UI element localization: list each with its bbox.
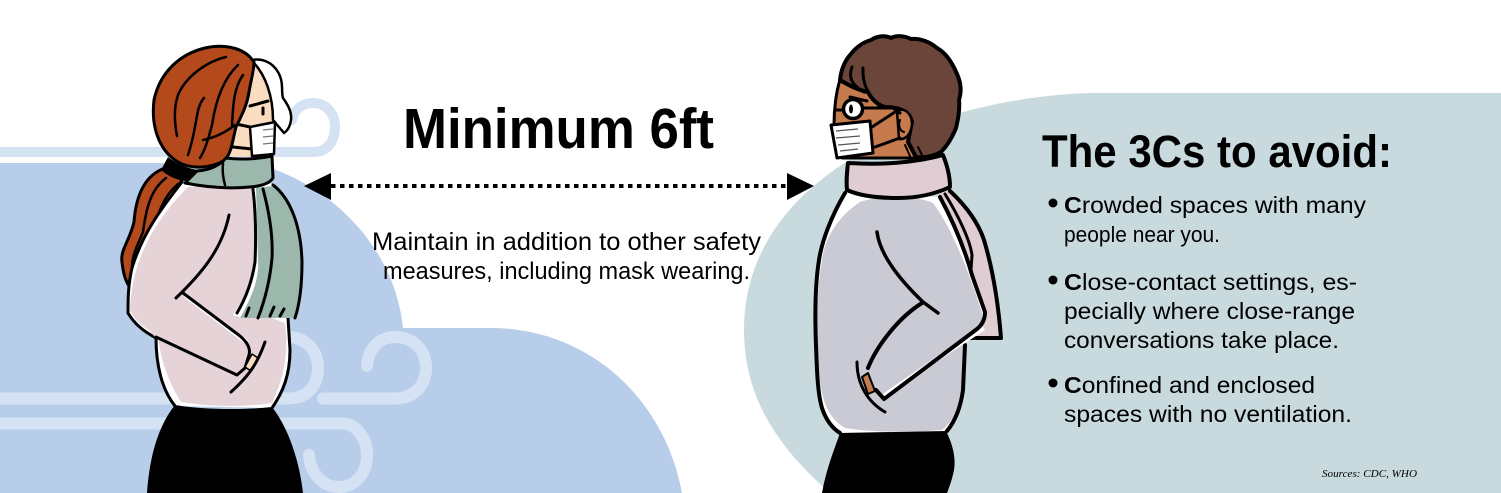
face bbox=[228, 62, 273, 156]
wind lines bbox=[0, 103, 426, 487]
eyebrow and eye bbox=[250, 101, 268, 114]
item: crowded bbox=[1048, 192, 1367, 247]
title: minimum 6ft: Minimum 6ft bbox=[403, 97, 714, 161]
coat bbox=[128, 182, 302, 408]
caption: measures, including mask wearing. bbox=[383, 258, 750, 285]
caption: Maintain in addition to other safety bbox=[372, 228, 761, 256]
background: blue cloud bbox=[0, 163, 682, 493]
pocket bbox=[857, 362, 885, 412]
background: teal cloud bbox=[744, 93, 1501, 493]
red hair bbox=[153, 46, 254, 167]
hanging scarf bbox=[938, 190, 1001, 338]
distance arrow bbox=[304, 173, 814, 200]
ponytail bbox=[122, 168, 182, 286]
item: close-contact: conversations take place. bbox=[1064, 327, 1339, 353]
sources: Sources: CDC, WHO bbox=[1322, 469, 1417, 480]
skirt bbox=[147, 405, 303, 493]
pants bbox=[822, 431, 955, 493]
scarf tail bbox=[233, 185, 302, 318]
list: 3Cs bbox=[1048, 192, 1367, 427]
scarf collar bbox=[847, 155, 950, 198]
face bbox=[834, 80, 925, 158]
white hair strand bbox=[252, 60, 291, 133]
item: close-contact bbox=[1048, 269, 1357, 353]
left arrowhead bbox=[304, 173, 331, 200]
ear bbox=[897, 110, 912, 139]
right arrowhead bbox=[787, 173, 814, 200]
scrunchie bbox=[161, 157, 197, 181]
caption bbox=[372, 228, 761, 285]
heading: the 3Cs to avoid: The 3Cs to avoid: bbox=[1042, 126, 1392, 177]
glasses bbox=[836, 97, 900, 118]
item: close-contact: Close-contact settings, es- bbox=[1064, 269, 1357, 295]
scarf neck wrap bbox=[185, 156, 273, 188]
mask strap bbox=[233, 124, 252, 149]
coat bbox=[815, 193, 985, 433]
dotted line bbox=[331, 184, 786, 188]
arm bbox=[133, 215, 250, 375]
item: confined: spaces with no ventilation. bbox=[1064, 401, 1352, 427]
face mask bbox=[250, 122, 275, 156]
cuff bbox=[245, 354, 258, 371]
face mask bbox=[831, 121, 873, 158]
item: confined: Confined and enclosed bbox=[1064, 372, 1315, 398]
item: crowded: people near you. bbox=[1064, 222, 1220, 247]
arm bbox=[868, 197, 985, 399]
pocket bbox=[231, 342, 265, 392]
hair bbox=[840, 36, 961, 157]
cuff bbox=[862, 373, 875, 394]
item: close-contact: pecially where close-range bbox=[1064, 298, 1355, 324]
person: woman with red hair bbox=[122, 46, 303, 493]
item: confined bbox=[1048, 372, 1352, 427]
neck hair lines bbox=[905, 145, 923, 157]
person: woman with glasses bbox=[815, 36, 1001, 493]
mask straps bbox=[872, 112, 900, 147]
item: crowded: Crowded spaces with many bbox=[1064, 192, 1367, 218]
